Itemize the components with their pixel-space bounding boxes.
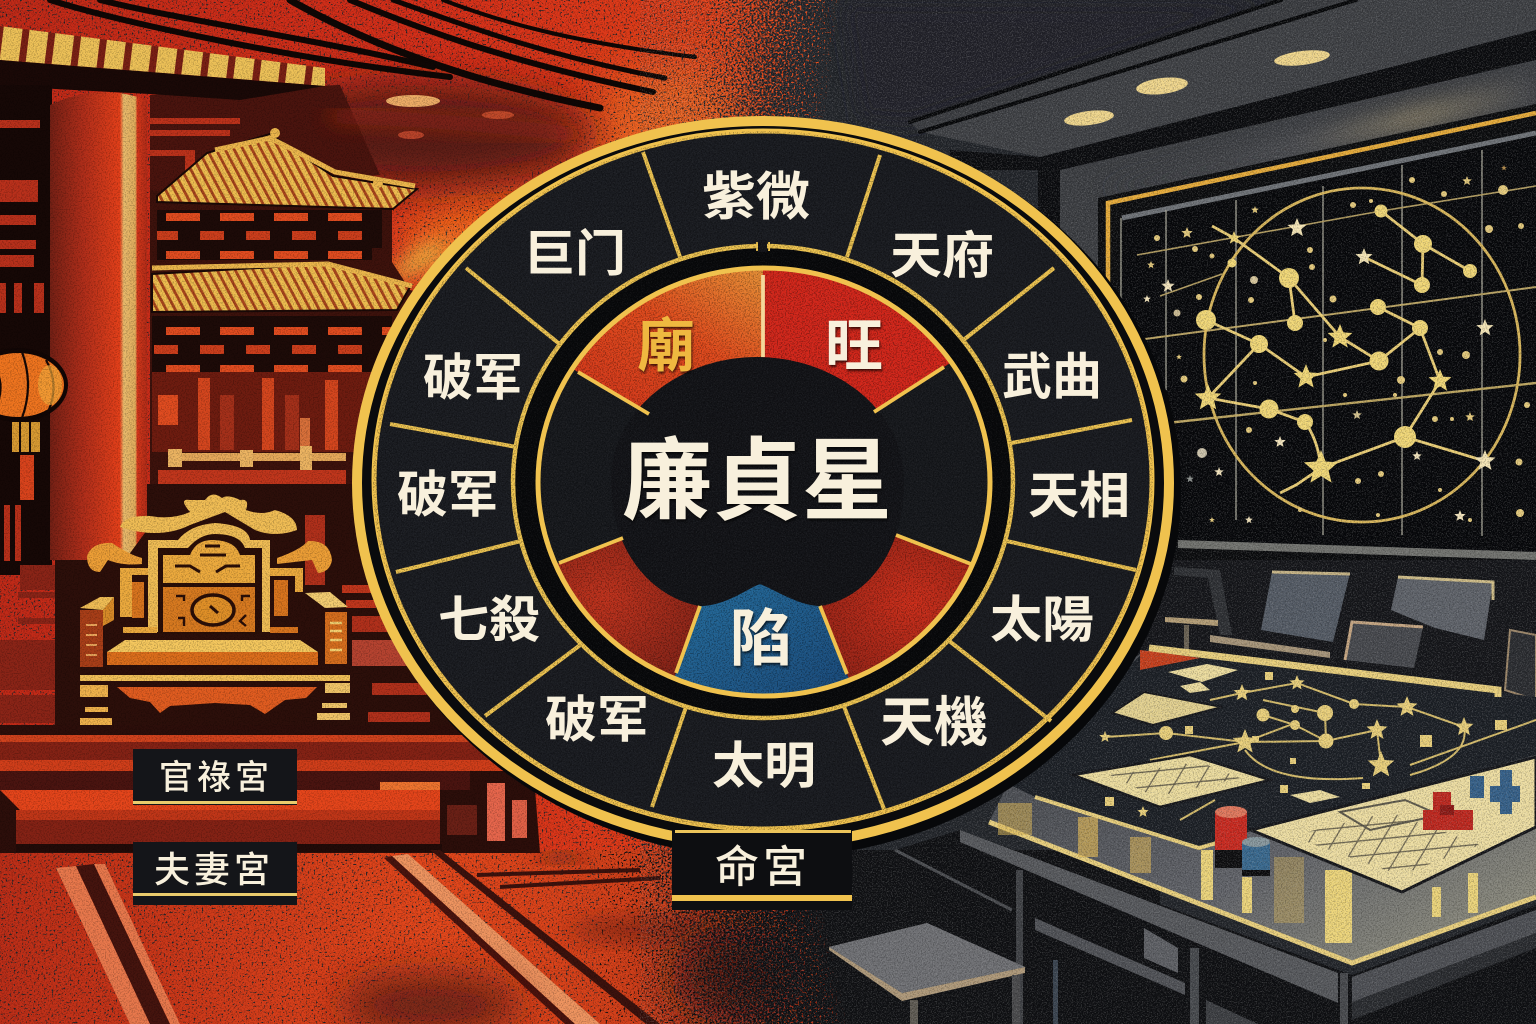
- chair seat rail: [1210, 635, 1330, 658]
- chair back two edge: [1398, 577, 1493, 600]
- inner gold ring: [538, 268, 990, 696]
- red tokens: [1423, 792, 1473, 830]
- upper ridge: [215, 128, 415, 188]
- table gold front edge: [989, 822, 1536, 963]
- table understructure: [895, 830, 1536, 1024]
- wheel thin gold ring and star cells: [374, 131, 1152, 829]
- red corner cloth: [1140, 650, 1200, 670]
- conference chairs: [1165, 567, 1536, 700]
- star: 破军 upper: 破军: [423, 350, 523, 406]
- wheel shadow band: [357, 120, 1181, 858]
- throne seat: [107, 640, 318, 665]
- paper chart two: [1073, 755, 1270, 807]
- upper bracket band: [157, 210, 382, 260]
- throne upper panel: [163, 540, 255, 583]
- label: 廟: 廟: [637, 314, 695, 379]
- constellation circle: [1204, 188, 1520, 522]
- roof eave black rafters: [50, 0, 695, 108]
- wedge: lower right dark red: [820, 535, 970, 678]
- blue marker cylinder: [1242, 837, 1270, 876]
- wheel middle band: [513, 246, 1013, 718]
- throne scroll wings: [87, 541, 332, 573]
- bracket near column: [150, 118, 240, 180]
- label: 旺: 旺: [825, 314, 883, 379]
- top ring gap: [756, 240, 770, 252]
- label: 陷: 陷: [730, 605, 792, 674]
- floor dark lines: [477, 870, 660, 887]
- lower pagoda roof: [152, 264, 410, 312]
- big paper plan: [1251, 757, 1536, 892]
- map constellation lines: [1105, 683, 1536, 820]
- lower ridge: [152, 264, 412, 286]
- wedge: wang: [763, 270, 950, 408]
- astrology wheel: [357, 120, 1181, 858]
- red marker cylinder: [1215, 806, 1247, 868]
- label: 夫妻宮: 夫妻宮: [154, 849, 274, 890]
- chair far left: [1165, 567, 1232, 663]
- wheel outer gold ring: [357, 121, 1169, 845]
- label: 官祿宮: 官祿宮: [159, 759, 273, 797]
- blue tokens: [1470, 770, 1520, 814]
- chair back one: [1261, 572, 1350, 642]
- gold eave dentils: [0, 26, 325, 86]
- ceiling upper dark: [840, 0, 1285, 125]
- throne arms: [80, 592, 348, 667]
- dark beam under eave: [0, 60, 325, 100]
- star: 破军 middle: 破军: [397, 467, 499, 523]
- wheel cell divider spokes: [390, 152, 1136, 809]
- star chart frame: [1098, 104, 1536, 560]
- recessed ceiling lights: [1063, 48, 1331, 128]
- star chart gold border: [1108, 113, 1536, 292]
- star: 巨门: 巨门: [524, 226, 626, 282]
- dignity labels: [637, 314, 883, 674]
- major stars: [1195, 204, 1495, 483]
- chair far right: [1505, 630, 1536, 700]
- black cove band: [950, 30, 1536, 560]
- ceiling red streak: [330, 116, 580, 135]
- star map surface: [1000, 648, 1536, 848]
- star: 七殺: 七殺: [438, 592, 540, 648]
- map gold edges: [1035, 648, 1498, 848]
- star: 太陽: 太陽: [990, 592, 1094, 648]
- chair back two: [1391, 577, 1493, 640]
- wall strip: [1060, 60, 1536, 560]
- paper chart three: [1112, 692, 1222, 725]
- small scattered stars: [1143, 165, 1530, 523]
- table legs and panels: [895, 850, 1536, 1024]
- pagoda back wall: [150, 190, 450, 490]
- palace steps: [0, 725, 540, 853]
- railing: [158, 446, 346, 484]
- left lattice wall: [0, 85, 80, 723]
- floor runner stripes: [56, 850, 660, 1024]
- star: 武曲: 武曲: [1002, 349, 1102, 405]
- table slab front face: [960, 830, 1338, 1003]
- map stars: [1099, 672, 1507, 817]
- throne lower panel and medallion: [163, 587, 255, 632]
- wedge: miao: [574, 270, 763, 407]
- left scene: palace: [0, 0, 710, 1024]
- upper pagoda roof: [157, 134, 417, 209]
- chair low edge: [1345, 622, 1423, 660]
- paper lantern: [0, 348, 68, 561]
- center title: 廉貞星: [622, 432, 892, 532]
- inner ring grain: [370, 130, 1160, 830]
- throne crest: [120, 494, 297, 534]
- wall highlight: [1100, 76, 1536, 190]
- star chart panel: [1122, 132, 1536, 552]
- label: 夫妻宮: [133, 842, 297, 905]
- grain over left scene: [0, 0, 790, 1024]
- wedge: lower left dark red: [558, 540, 700, 676]
- star: 紫微: 紫微: [702, 169, 810, 227]
- throne side panels: [120, 568, 303, 633]
- floor dark patches: [340, 854, 710, 1024]
- star: 天機: 天機: [880, 693, 988, 753]
- star chart grid: [1121, 150, 1536, 536]
- ceiling beams: [910, 0, 1356, 132]
- grain over right scene: [640, 0, 1536, 1024]
- label: 命宮: [672, 830, 852, 910]
- ceiling strip between beams: [910, 0, 1356, 132]
- star: 天府: 天府: [890, 228, 994, 284]
- throne back dark inset: [158, 534, 262, 634]
- wedge: xian blue: [675, 584, 848, 694]
- star: 破军 lower: 破军: [545, 692, 649, 748]
- background: red left half with stippled transition: [0, 0, 880, 1024]
- inner ring dividers: [559, 275, 971, 674]
- dignity wedges: [558, 270, 970, 694]
- label: 官祿宮: [133, 749, 297, 805]
- paper small diamonds: [1168, 664, 1340, 803]
- lower room shadow: [1040, 560, 1536, 700]
- table top slab: [989, 648, 1536, 963]
- chair low: [1345, 622, 1423, 668]
- area behind throne: [50, 484, 455, 729]
- stool: [829, 923, 1025, 1024]
- star: 天相: 天相: [1028, 468, 1130, 524]
- throne back: [148, 523, 270, 632]
- center disc: [611, 357, 904, 606]
- table reflections: [998, 803, 1478, 943]
- table slab right face: [1352, 910, 1536, 1002]
- constellation lines: [1206, 211, 1485, 493]
- chair back one edge: [1272, 572, 1350, 574]
- dark ceiling behind pagoda: [150, 85, 590, 200]
- lacquer column: [50, 92, 147, 560]
- lower bracket band: [152, 316, 392, 372]
- label: 命宮: 命宮: [715, 843, 811, 892]
- inner ring field: [538, 268, 990, 696]
- star: 太明: 太明: [712, 738, 816, 794]
- imperial throne: [80, 494, 350, 726]
- panel bottom edge: [1178, 544, 1536, 556]
- throne base: [80, 675, 350, 726]
- panel edge: [1122, 133, 1536, 218]
- pagoda hall columns: [152, 372, 412, 452]
- orange sky patch beside pagoda: [385, 238, 455, 282]
- star names: [397, 169, 1130, 794]
- ceiling grey panel: [920, 0, 1536, 157]
- ceiling lights: [386, 95, 514, 139]
- right scene: star chart war room: [829, 0, 1536, 1024]
